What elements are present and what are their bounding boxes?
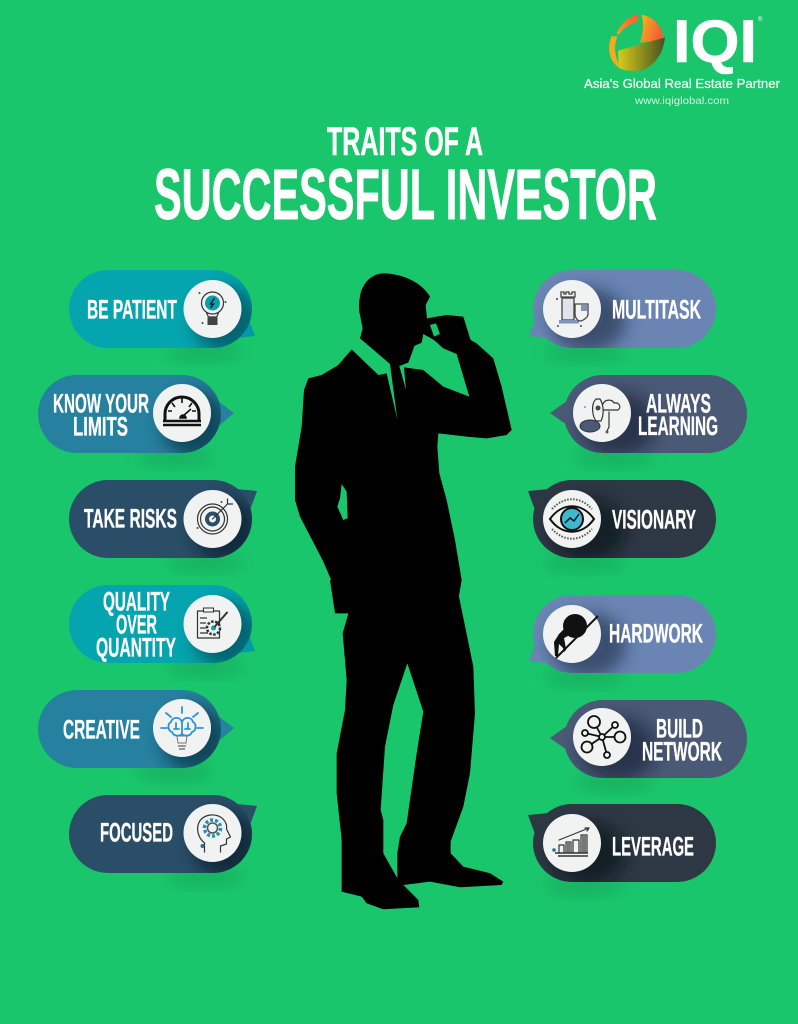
icon: gauge — [153, 384, 211, 442]
registered mark: ® — [758, 16, 763, 23]
trait label: BE PATIENT — [87, 294, 177, 324]
trait label: KNOW YOUR — [53, 388, 149, 418]
trait label line 2: LIMITS — [73, 412, 128, 442]
trait label: LEVERAGE — [612, 832, 694, 862]
silhouette legs and shoes — [330, 580, 503, 909]
trait label: ALWAYS — [646, 388, 711, 418]
trait label line 2: NETWORK — [642, 736, 722, 766]
icon: eye — [543, 490, 601, 548]
icon: clipboard and gear — [184, 595, 242, 653]
icon: rocket and clouds — [573, 384, 631, 442]
panel: build network — [550, 700, 747, 789]
trait label: BUILD — [656, 714, 703, 744]
trait label line 2: OVER — [116, 610, 157, 640]
silhouette upper body — [295, 273, 512, 603]
logo: IQI — [584, 8, 780, 107]
panel: know your limits — [38, 375, 234, 464]
panel: creative — [38, 690, 234, 779]
trait label: MULTITASK — [612, 294, 701, 324]
trait label: HARDWORK — [609, 618, 703, 648]
panel: be patient — [69, 270, 259, 359]
panel: quality over quantity — [69, 585, 259, 674]
panel: hardwork — [529, 595, 716, 684]
panel: take risks — [69, 480, 259, 569]
trait label: QUALITY — [103, 586, 170, 616]
title line 1: TRAITS OF A — [327, 120, 483, 164]
icon: chess rook and shield — [543, 280, 601, 338]
trait label: FOCUSED — [100, 818, 173, 848]
icon: network — [573, 708, 631, 766]
panel: visionary — [528, 480, 716, 569]
icon: brain bulb — [153, 699, 211, 757]
trait label: CREATIVE — [63, 714, 140, 744]
trait label: TAKE RISKS — [84, 504, 177, 534]
logo wordmark: IQI — [673, 8, 757, 75]
icon: head with gear — [184, 804, 242, 862]
website: www.iqiglobal.com — [634, 95, 729, 107]
panel: multitask — [529, 270, 716, 359]
trait label: VISIONARY — [612, 504, 696, 534]
icon: rising bar chart — [543, 814, 601, 872]
icon: light bulb — [184, 280, 242, 338]
icon: man pushing boulder — [543, 605, 601, 663]
panel: focused — [69, 795, 259, 884]
title — [154, 120, 657, 235]
icon: target — [184, 490, 242, 548]
panel: always learning — [550, 375, 747, 464]
silhouette of businessman — [295, 273, 512, 909]
tagline: Asia's Global Real Estate Partner — [584, 77, 780, 91]
trait label line 2: LEARNING — [638, 411, 718, 441]
panel: leverage — [528, 804, 716, 893]
logo mark — [609, 14, 665, 71]
trait label line 3: QUANTITY — [96, 632, 176, 662]
